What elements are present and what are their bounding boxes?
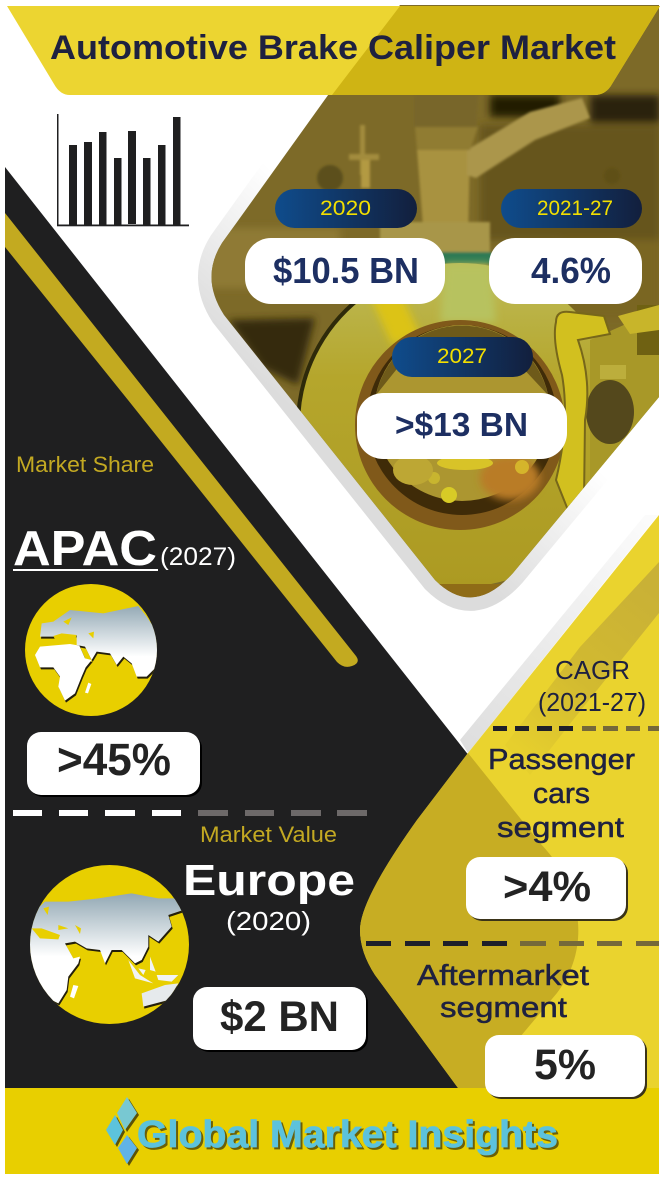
- stat: 2027 market size: 2027: [437, 345, 487, 368]
- title banner: [7, 6, 660, 95]
- passenger cars segment: Passenger: [488, 744, 635, 776]
- footer bar: [5, 1088, 659, 1174]
- heading: Europe 2020: [183, 856, 355, 936]
- value box: $2 BN: [193, 987, 368, 1052]
- stat: 2021-27 CAGR: [489, 189, 642, 304]
- value box: 5%: 5%: [534, 1041, 596, 1089]
- aftermarket segment: Aftermarket: [417, 960, 589, 992]
- stat: 2021-27 CAGR: 4.6%: [531, 250, 611, 291]
- logo: diamond mark: [106, 1097, 139, 1166]
- heading: market share: Market Share: [16, 452, 154, 477]
- divider dashes: lower right: [366, 941, 659, 946]
- disc bottom rust: [439, 584, 502, 598]
- heading: APAC 2027: [13, 522, 236, 576]
- photo panel: brake disc and caliper: [190, 0, 665, 620]
- value box: 5%: [485, 1035, 647, 1099]
- passenger cars segment: segment: [497, 812, 624, 844]
- divider dashes: left: [13, 810, 367, 816]
- bar chart icon: [57, 114, 189, 226]
- caliper: [590, 325, 659, 480]
- value box: >45%: >45%: [57, 734, 171, 785]
- dark panel: [5, 167, 470, 1088]
- stat: 2027 market size: >$13 BN: [395, 406, 528, 443]
- value box: >45%: [27, 732, 202, 797]
- label: CAGR: CAGR: [555, 655, 630, 685]
- label: CAGR: [538, 655, 646, 717]
- hub: [355, 320, 565, 530]
- stat: 2020 market size: 2020: [320, 197, 371, 220]
- passenger cars segment: cars: [533, 778, 590, 810]
- heading: Europe 2020: (2020): [226, 906, 311, 936]
- heading: APAC 2027: (2027): [160, 543, 236, 571]
- label: CAGR: (2021-27): [538, 687, 646, 717]
- gold diagonal stripe: [5, 213, 358, 667]
- heading: Europe 2020: Europe: [183, 856, 355, 905]
- yellow panel: [360, 515, 659, 1088]
- light band beside yellow panel: [460, 515, 658, 753]
- brake disc: [298, 263, 622, 587]
- stat: 2020 market size: [245, 189, 445, 304]
- aftermarket segment: [417, 960, 589, 1024]
- passenger cars segment: [488, 744, 635, 844]
- stat: 2027 market size: [357, 337, 567, 459]
- stat: 2020 market size: $10.5 BN: [273, 250, 419, 291]
- icon: globe showing Asia and Australia: [25, 865, 189, 1024]
- heading: market value: Market Value: [200, 822, 337, 847]
- heading: title text: Automotive Brake Caliper Market: [50, 29, 616, 67]
- logo: Global Market Insights wordmark: Global Market Insights: [137, 1114, 558, 1156]
- stat: 2021-27 CAGR: 2021-27: [537, 197, 613, 220]
- logo: Global Market Insights wordmark: Global Market Insights: [139, 1116, 560, 1158]
- value box: $2 BN: $2 BN: [220, 993, 339, 1041]
- value box: >4%: >4%: [503, 863, 591, 911]
- divider dashes: upper right: [493, 726, 659, 731]
- icon: globe showing Africa and Asia: [25, 584, 161, 716]
- value box: >4%: [466, 857, 628, 921]
- heading: APAC 2027: APAC: [13, 522, 157, 576]
- aftermarket segment: segment: [440, 992, 567, 1024]
